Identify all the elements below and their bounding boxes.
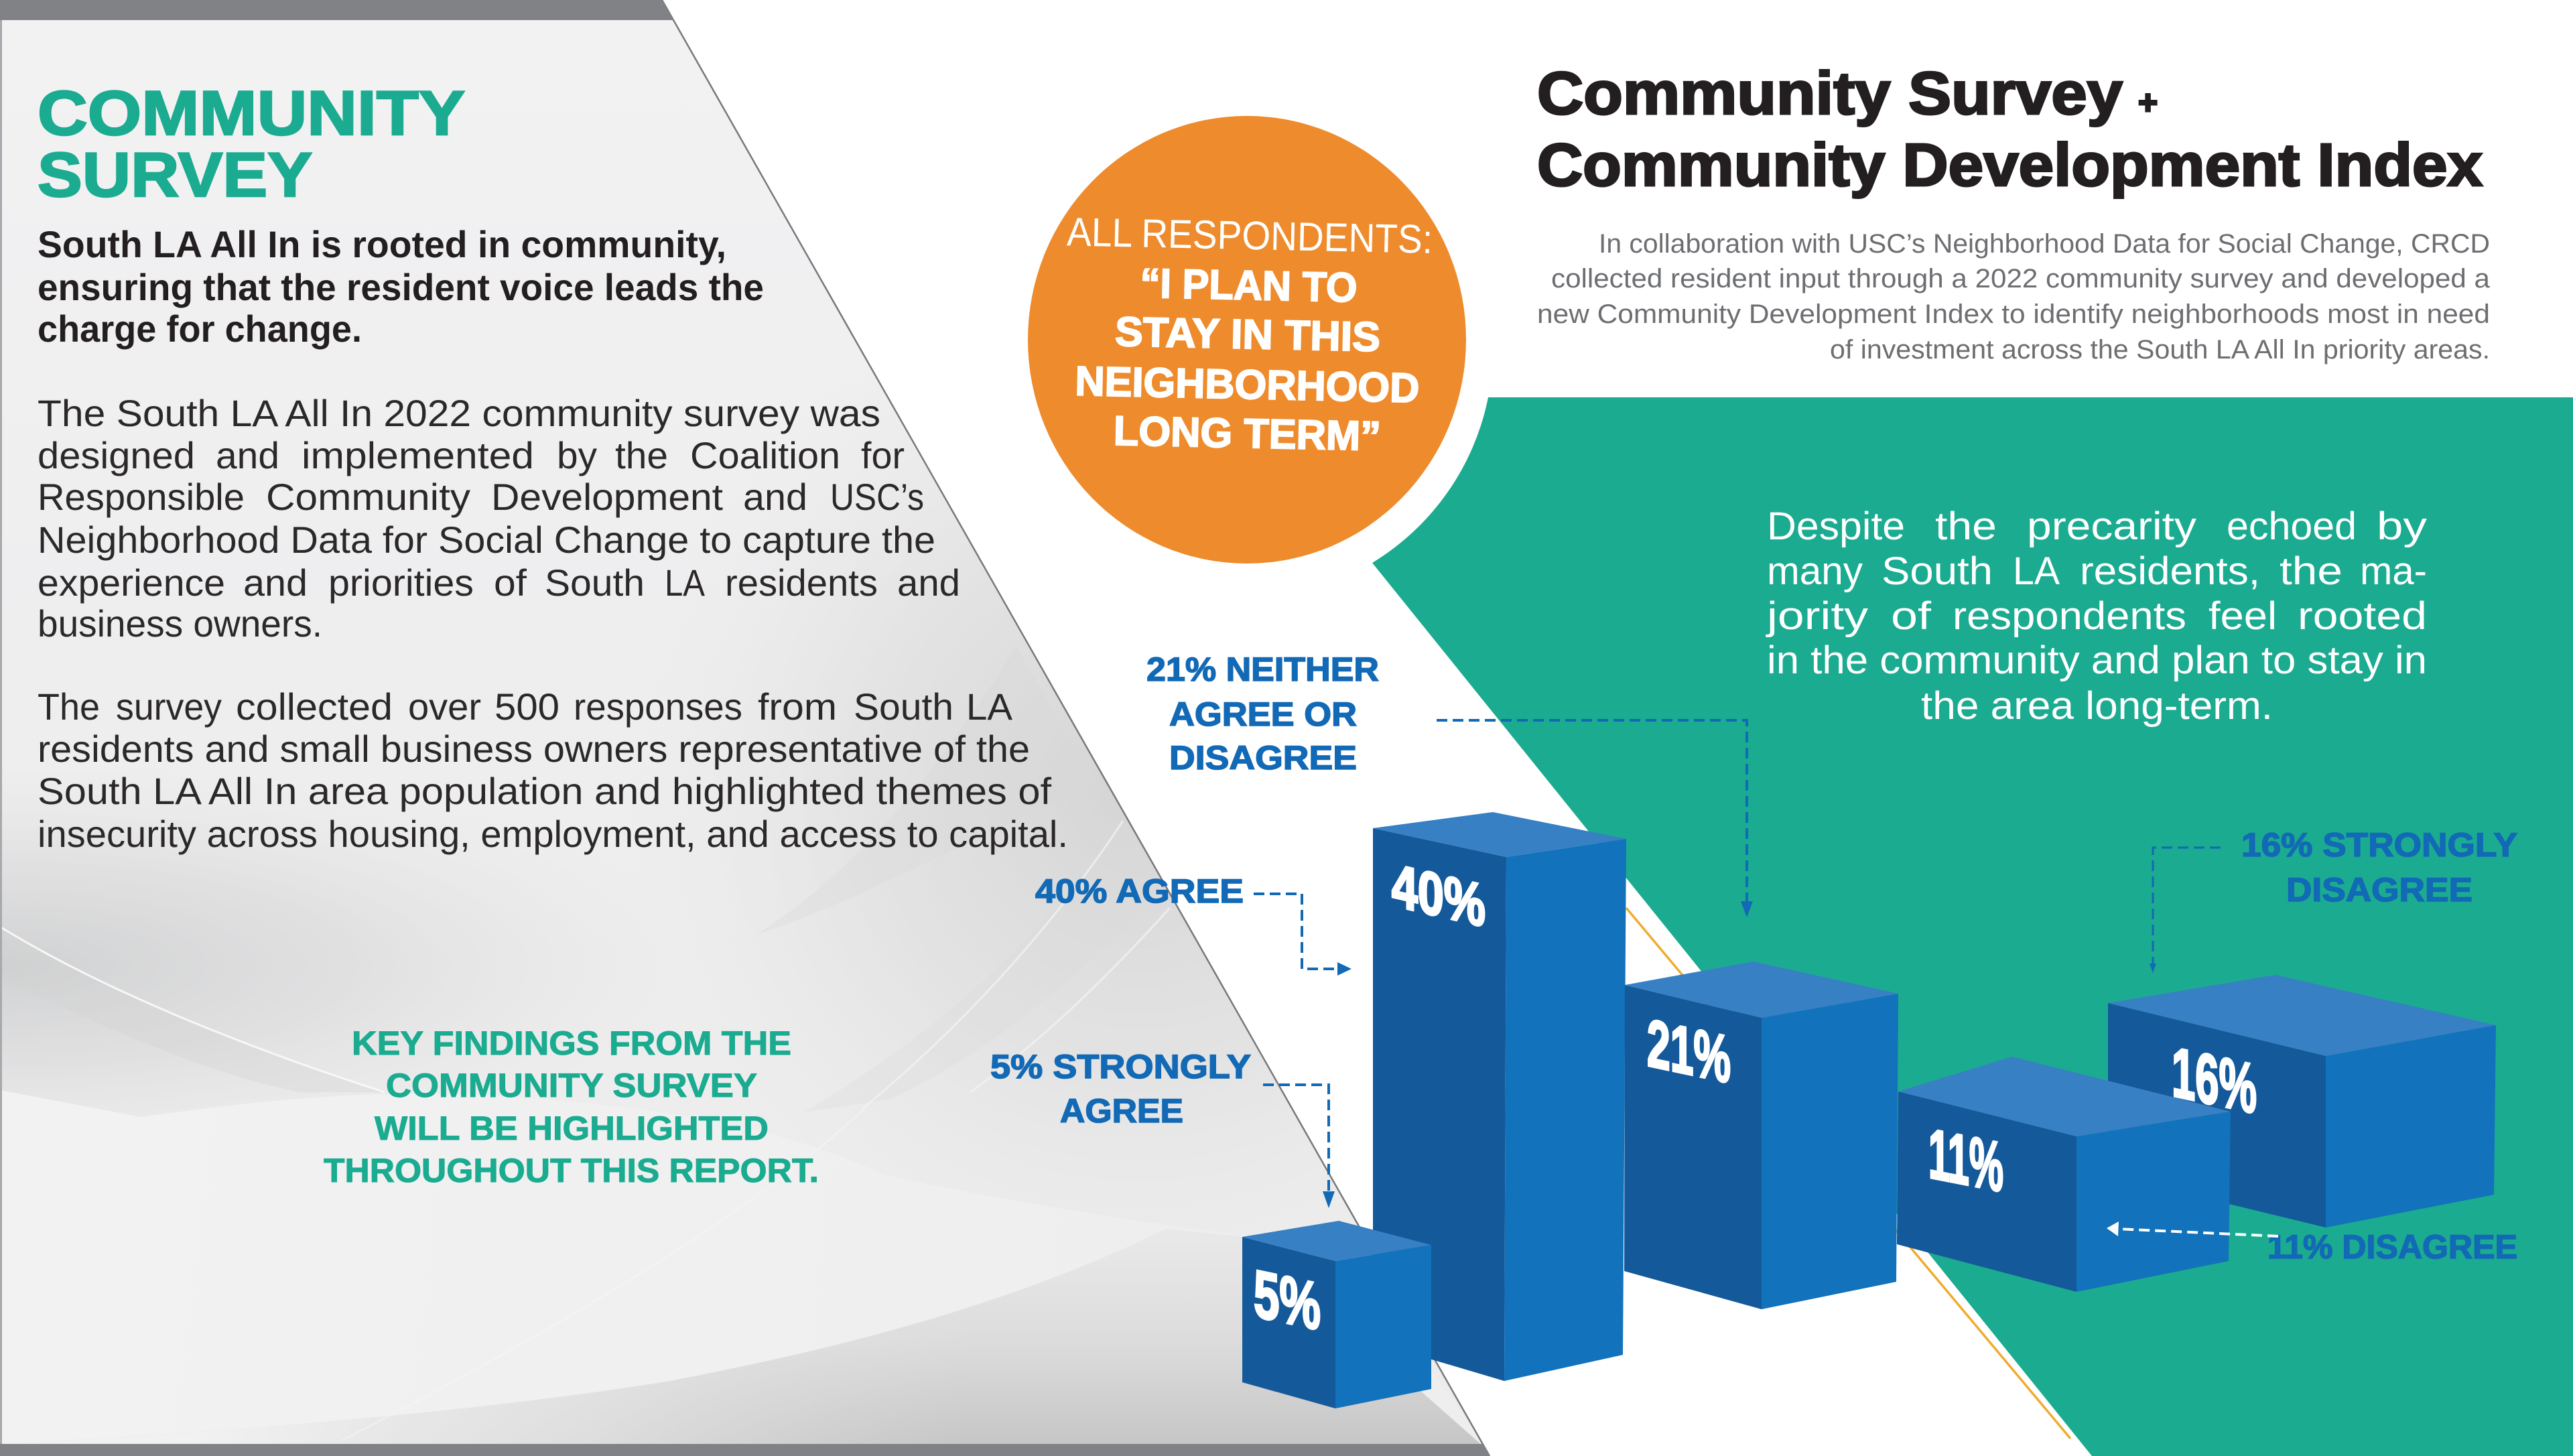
bar: 11% disagree: 11%: [1928, 1114, 2003, 1207]
paragraph: survey responses: insecurity across housing, employment, and access to capital.: [38, 813, 1068, 855]
bar: 16% strongly disagree: 16%: [2172, 1033, 2257, 1129]
paragraph: survey responses: 500: [494, 685, 559, 728]
bar: 5% strongly agree: 5%: [1254, 1256, 1321, 1345]
paragraph: survey responses: South: [854, 685, 953, 728]
panel: gray background with text: [0, 0, 1494, 1456]
bar: 40% agree: 40%: [1392, 851, 1486, 940]
paragraph: survey design: the: [615, 434, 668, 476]
paragraph: survey design: South: [545, 561, 645, 604]
paragraph: survey design: and: [743, 476, 807, 518]
text: despite the precarity: by: [2377, 505, 2427, 548]
callout: orange circle quote: NEIGHBORHOOD: [1075, 358, 1420, 411]
arrow: 11% disagree: [2107, 1221, 2278, 1236]
label: 21% neither: 21% NEITHER: [1146, 651, 1379, 688]
text: despite the precarity: jority: [1766, 594, 1868, 638]
label: 21% neither: AGREE OR: [1169, 696, 1357, 733]
paragraph: survey design: Coalition: [690, 434, 840, 476]
paragraph: survey design: experience: [38, 561, 225, 604]
arrow: 16% strongly disagree: [2150, 848, 2221, 973]
paragraph: survey responses: collected: [236, 685, 393, 728]
paragraph: survey design: implemented: [302, 434, 534, 476]
paragraph: survey responses: from: [758, 685, 837, 728]
callout: orange circle quote: STAY IN THIS: [1114, 309, 1381, 360]
heading: community survey: COMMUNITY: [38, 78, 465, 148]
text: despite the precarity: echoed: [2227, 505, 2357, 548]
title: community survey and development index: Community Survey: [1537, 60, 2123, 127]
callout: orange circle quote: LONG TERM”: [1113, 408, 1382, 460]
paragraph: survey design: by: [557, 434, 597, 476]
callout: orange circle quote: “I PLAN TO: [1140, 261, 1358, 311]
intro text block: new Community Development Index to identify neighborhoods most in need: [1537, 300, 2490, 329]
paragraph: survey responses: residents and small business owners representative of the: [38, 728, 1030, 770]
title: community survey and development index: [1537, 60, 2483, 199]
paragraph: survey design: [38, 392, 960, 645]
intro text block: [1537, 229, 2491, 365]
text: despite the precarity: rooted: [2298, 594, 2427, 638]
yellow accent line: [1626, 908, 2070, 1439]
label: 5% strongly agree: 5% STRONGLY: [990, 1048, 1251, 1085]
heading: community survey: [38, 78, 465, 210]
text: despite the precarity: precarity: [2027, 505, 2196, 548]
bar: 21% neither: 21%: [1647, 1005, 1731, 1098]
paragraph: survey design: of: [494, 561, 527, 604]
label: 16% strongly disagree: [2241, 826, 2517, 909]
paragraph: survey design: residents: [725, 561, 878, 604]
paragraph: survey design: for: [861, 434, 905, 476]
text: despite the precarity: [1766, 505, 2427, 728]
title: community survey and development index: +: [2138, 84, 2158, 121]
text: despite the precarity: the: [1935, 505, 1997, 548]
label: 21% neither: DISAGREE: [1169, 739, 1357, 777]
text: despite the precarity: Despite: [1767, 505, 1905, 548]
intro text block: of investment across the South LA All In priority areas.: [1830, 335, 2490, 365]
paragraph: survey design: The South LA All In 2022 community survey was: [38, 392, 880, 434]
arrow: 5% strongly agree: [1263, 1085, 1335, 1208]
text: despite the precarity: ma-: [2360, 549, 2427, 593]
arrow: 21% neither: [1437, 720, 1753, 917]
callout: key findings: WILL BE HIGHLIGHTED: [375, 1110, 769, 1147]
paragraph: survey design: Development: [491, 476, 723, 518]
text: despite the precarity: South: [1882, 549, 1993, 593]
lead text block: ensuring that the resident voice leads the: [38, 266, 764, 308]
text: despite the precarity: residents,: [2080, 549, 2260, 593]
paragraph: survey responses: LA: [966, 685, 1013, 728]
paragraph: survey design: USC’s: [830, 476, 924, 518]
text: despite the precarity: of: [1891, 594, 1932, 638]
label: 5% strongly agree: [990, 1048, 1251, 1130]
paragraph: survey design: business owners.: [38, 602, 322, 645]
paragraph: survey responses: South LA All In area population and highlighted themes of: [38, 770, 1051, 812]
callout: orange circle quote: ALL RESPONDENTS:: [1066, 209, 1433, 262]
label: 16% strongly disagree: 16% STRONGLY: [2241, 826, 2517, 864]
intro text block: In collaboration with USC’s Neighborhood Data for Social Change, CRCD: [1599, 229, 2490, 259]
bar: 21% neither: [1624, 962, 1898, 1309]
paragraph: survey responses: responses: [574, 685, 742, 728]
paragraph: survey responses: over: [408, 685, 481, 728]
callout: key findings: COMMUNITY SURVEY: [386, 1067, 757, 1104]
label: 40% agree: 40% AGREE: [1035, 872, 1244, 910]
bar: 16% strongly disagree: [2108, 975, 2496, 1228]
bar: 40% agree: [1373, 812, 1626, 1381]
text: despite the precarity: respondents: [1953, 594, 2186, 638]
text: despite the precarity: feel: [2208, 594, 2277, 638]
lead text block: [38, 223, 764, 350]
paragraph: survey design: priorities: [328, 561, 474, 604]
paragraph: survey design: Community: [266, 476, 470, 518]
text: despite the precarity: in the community and plan to stay in: [1767, 639, 2427, 682]
label: 16% strongly disagree: DISAGREE: [2286, 871, 2472, 909]
text: despite the precarity: the area long-term.: [1921, 684, 2273, 728]
paragraph: survey design: and: [243, 561, 308, 604]
text: despite the precarity: LA: [2013, 549, 2060, 593]
lead text block: charge for change.: [38, 308, 362, 350]
label: 21% neither: [1146, 651, 1379, 777]
lead text block: South LA All In is rooted in community,: [38, 223, 726, 265]
text: despite the precarity: many: [1767, 549, 1863, 593]
label: 11% disagree: 11% DISAGREE: [2267, 1228, 2517, 1266]
title: community survey and development index: Community Development Index: [1537, 132, 2483, 199]
callout: key findings: [324, 1024, 819, 1189]
paragraph: survey design: Responsible: [38, 476, 245, 518]
callout: key findings: KEY FINDINGS FROM THE: [352, 1024, 791, 1062]
top gray bar: [0, 0, 673, 20]
arrow: 40% agree: [1254, 894, 1351, 976]
heading: community survey: SURVEY: [38, 139, 312, 210]
label: 5% strongly agree: AGREE: [1060, 1092, 1183, 1130]
bottom gray bar: [0, 1444, 1490, 1456]
bar: 5% strongly agree: [1242, 1221, 1431, 1408]
paragraph: survey responses: [38, 685, 1068, 855]
paragraph: survey design: Neighborhood Data for Social Change to capture the: [38, 519, 935, 561]
bar: 11% disagree: [1897, 1057, 2231, 1292]
paragraph: survey responses: The: [38, 685, 100, 728]
paragraph: survey responses: survey: [116, 685, 222, 728]
bar chart: survey responses: [1242, 812, 2496, 1408]
panel: green area: [1372, 397, 2573, 1456]
callout: orange circle quote: [1028, 116, 1466, 564]
text: despite the precarity: the: [2280, 549, 2343, 593]
paragraph: survey design: and: [897, 561, 960, 604]
paragraph: survey design: LA: [665, 561, 706, 604]
callout: key findings: THROUGHOUT THIS REPORT.: [324, 1152, 819, 1189]
paragraph: survey design: designed: [38, 434, 195, 476]
intro text block: collected resident input through a 2022 community survey and developed a: [1551, 264, 2491, 293]
paragraph: survey design: and: [216, 434, 279, 476]
